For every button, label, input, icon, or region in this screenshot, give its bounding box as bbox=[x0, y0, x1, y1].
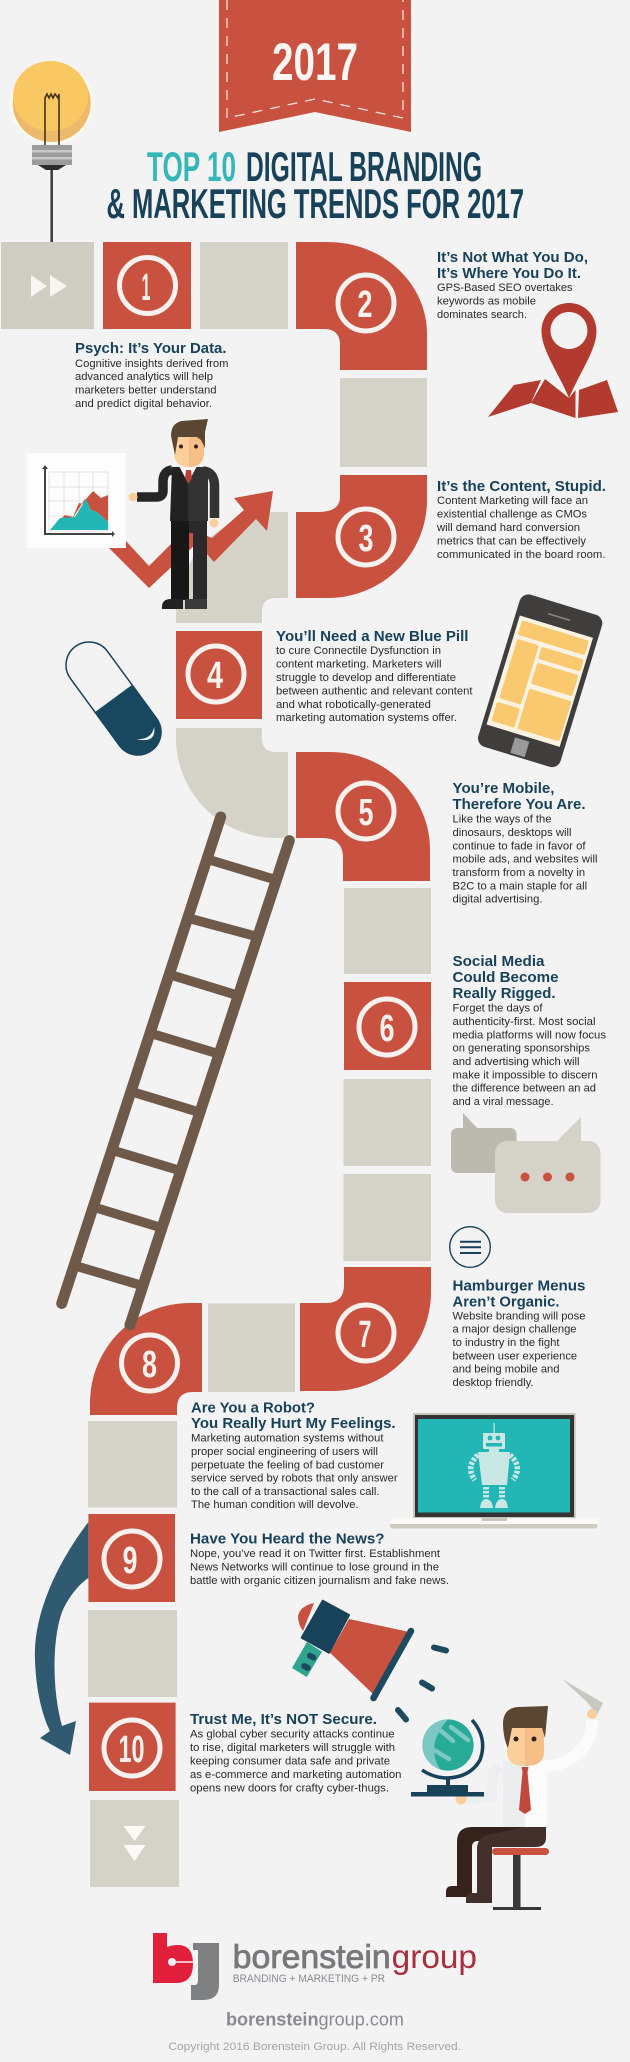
text: step 2: dominates search. bbox=[437, 309, 527, 321]
step 3: 3 bbox=[358, 518, 374, 560]
text: step 3: will demand hard conversion bbox=[436, 522, 580, 534]
text: step 8: to the call of a transactional sales call. bbox=[191, 1486, 380, 1498]
icon: smartphone bbox=[476, 592, 605, 769]
text: step 9: Nope, you’ve read it on Twitter first. Establishment bbox=[190, 1548, 441, 1560]
step 4: 4 bbox=[207, 655, 223, 697]
logo mark bbox=[153, 1933, 219, 2000]
blank tiles bbox=[344, 1079, 431, 1261]
step 1: 1 bbox=[142, 267, 150, 309]
text: step 5: You’re Mobile, bbox=[452, 780, 554, 797]
ladder bbox=[62, 817, 289, 1325]
text: step 6: make it impossible to discern bbox=[452, 1069, 598, 1081]
text: step 3: communicated in the board room. bbox=[437, 549, 606, 561]
text: step 6: Could Become bbox=[452, 969, 558, 986]
text: step 2: keywords as mobile bbox=[437, 296, 536, 308]
step 10: 10 bbox=[118, 1729, 144, 1771]
text: step 8: Marketing automation systems without bbox=[191, 1432, 384, 1444]
text: step 10 bbox=[190, 1711, 401, 1794]
text: step 5: digital advertising. bbox=[452, 894, 542, 906]
text: step 4: marketing automation systems offer. bbox=[276, 712, 457, 724]
logo wordmark: BRANDING + MARKETING + PR bbox=[233, 1973, 385, 1985]
title: TOP 10 bbox=[147, 143, 236, 190]
step 8: 8 bbox=[142, 1344, 157, 1386]
text: step 8: service served by robots that only answer bbox=[191, 1472, 398, 1484]
copyright: Copyright 2016 Borenstein Group. All Rights Reserved. bbox=[168, 2041, 461, 2053]
text: step 5: transform from a novelty in bbox=[452, 867, 585, 879]
icon: chat bubbles bbox=[451, 1113, 600, 1213]
text: step 4: to cure Connectile Dysfunction in bbox=[276, 645, 441, 657]
text: step 7: a major design challenge bbox=[452, 1324, 576, 1336]
step 10 bbox=[89, 1703, 176, 1791]
text: step 4: content marketing. Marketers will bbox=[276, 659, 442, 671]
text: step 6: and advertising which will bbox=[452, 1056, 580, 1068]
text: step 5: Like the ways of the bbox=[452, 814, 552, 826]
step 5 bbox=[296, 752, 430, 881]
text: step 10: keeping consumer data safe and private bbox=[190, 1755, 390, 1767]
text: step 4: struggle to develop and differentiate bbox=[276, 672, 456, 684]
step 5: 5 bbox=[358, 792, 374, 834]
text: step 6: media platforms will now focus bbox=[452, 1029, 606, 1041]
text: step 8: Are You a Robot? bbox=[191, 1400, 315, 1417]
text: step 1: and predict digital behavior. bbox=[75, 398, 212, 410]
text: step 1 bbox=[75, 340, 228, 410]
icon: laptop with robot bbox=[390, 1413, 598, 1528]
text: step 6: Really Rigged. bbox=[452, 985, 556, 1002]
blank tile bbox=[208, 1304, 295, 1392]
step 9: 9 bbox=[122, 1540, 138, 1582]
curved arrow from 9 to 10 bbox=[35, 1522, 88, 1755]
text: step 4: between authentic and relevant content bbox=[276, 686, 473, 698]
text: step 7: desktop friendly. bbox=[452, 1377, 534, 1389]
text: step 3: It’s the Content, Stupid. bbox=[437, 478, 606, 495]
text: step 6: Forget the days of bbox=[452, 1003, 543, 1015]
step 3 bbox=[296, 475, 427, 598]
end square bbox=[90, 1800, 179, 1887]
text: step 7: Aren’t Organic. bbox=[452, 1294, 560, 1311]
curved tile below man bbox=[176, 512, 288, 623]
text: step 2: It’s Not What You Do, bbox=[437, 249, 588, 266]
step 2: 2 bbox=[358, 284, 372, 326]
step 6 bbox=[344, 982, 431, 1070]
step 8 bbox=[90, 1303, 202, 1415]
step 7: 7 bbox=[358, 1314, 372, 1356]
illustration: chart panel bbox=[27, 453, 126, 548]
text: step 8: perpetuate the feeling of bad customer bbox=[191, 1459, 384, 1471]
text: step 2 bbox=[437, 249, 588, 321]
text: step 6: authenticity-first. Most social bbox=[452, 1016, 596, 1028]
text: step 1: Cognitive insights derived from bbox=[75, 358, 228, 370]
text: step 10: to rise, digital marketers will struggle with bbox=[190, 1742, 395, 1754]
text: step 5: mobile ads, and websites will bbox=[452, 854, 598, 866]
text: step 7: Website branding will pose bbox=[452, 1310, 586, 1322]
text: step 5: Therefore You Are. bbox=[452, 796, 586, 813]
illustration: rising arrow bbox=[109, 491, 273, 588]
text: step 4 bbox=[276, 628, 473, 724]
illustration: seated man bbox=[446, 1679, 603, 1910]
text: step 7: to industry in the fight bbox=[452, 1337, 560, 1349]
text: step 8 bbox=[191, 1400, 398, 1511]
text: step 7: and being mobile and bbox=[452, 1364, 560, 1376]
text: step 10: As global cyber security attacks continue bbox=[190, 1729, 395, 1741]
text: step 6 bbox=[452, 953, 606, 1108]
logo wordmark: borenstein bbox=[233, 1938, 391, 1975]
text: step 8: proper social engineering of users will bbox=[191, 1446, 378, 1458]
step 1 bbox=[103, 242, 191, 329]
text: step 8: The human condition will devolve. bbox=[191, 1499, 359, 1511]
text: step 6: on generating sponsorships bbox=[452, 1043, 590, 1055]
text: step 6: the difference between an ad bbox=[452, 1083, 596, 1095]
text: step 8: You Really Hurt My Feelings. bbox=[191, 1415, 396, 1432]
board path: start square bbox=[1, 242, 94, 329]
text: step 5: dinosaurs, desktops will bbox=[452, 827, 572, 839]
text: step 10: as e-commerce and marketing automation bbox=[190, 1769, 401, 1781]
text: step 10: Trust Me, It’s NOT Secure. bbox=[190, 1711, 377, 1728]
logo wordmark bbox=[233, 1938, 477, 1985]
blank tile bbox=[200, 242, 288, 329]
text: step 7: Hamburger Menus bbox=[452, 1278, 586, 1295]
text: step 1: Psych: It’s Your Data. bbox=[75, 340, 226, 357]
text: step 7: between user experience bbox=[452, 1350, 577, 1362]
logo wordmark: group bbox=[392, 1938, 477, 1975]
text: step 1: advanced analytics will help bbox=[75, 371, 213, 383]
text: step 5: continue to fade in favor of bbox=[452, 840, 586, 852]
text: step 4: You’ll Need a New Blue Pill bbox=[276, 628, 468, 645]
illustration: businessman bbox=[128, 419, 218, 609]
text: step 4: and what robotically-generated bbox=[276, 699, 431, 711]
step 4 bbox=[176, 631, 262, 719]
icon: megaphone bbox=[292, 1601, 446, 1720]
text: step 5 bbox=[452, 780, 598, 906]
curved tile below step 4 bbox=[176, 728, 288, 838]
text: step 2: GPS-Based SEO overtakes bbox=[437, 282, 573, 294]
banner: 2017 bbox=[219, 0, 411, 132]
icon: light bulb bbox=[10, 61, 94, 242]
website address: borensteingroup.com bbox=[226, 2010, 404, 2030]
step 7 bbox=[300, 1267, 431, 1391]
icon: map pin bbox=[488, 303, 618, 418]
text: step 9 bbox=[190, 1530, 449, 1587]
blank tile bbox=[344, 888, 431, 974]
text: step 3: Content Marketing will face an bbox=[437, 495, 588, 507]
banner: 2017: 2017 bbox=[272, 33, 358, 92]
text: step 2: It’s Where You Do It. bbox=[437, 265, 581, 282]
blank tile bbox=[88, 1421, 177, 1508]
text: step 7 bbox=[452, 1278, 586, 1389]
icon: globe bbox=[411, 1719, 484, 1796]
step 2 bbox=[296, 242, 427, 370]
text: step 9: News Networks will continue to lose ground in the bbox=[190, 1562, 439, 1574]
title bbox=[106, 143, 524, 227]
step 9 bbox=[88, 1514, 175, 1602]
blank tile bbox=[88, 1610, 177, 1697]
step 6: 6 bbox=[380, 1008, 394, 1050]
blank tile bbox=[340, 378, 427, 467]
text: step 6: Social Media bbox=[452, 953, 545, 970]
text: step 3: metrics that can be effectively bbox=[437, 536, 586, 548]
text: step 3 bbox=[436, 478, 606, 561]
text: step 9: Have You Heard the News? bbox=[190, 1530, 384, 1548]
text: step 3: existential challenge as CMOs bbox=[437, 509, 587, 521]
text: step 10: opens new doors for crafty cyber-thugs. bbox=[190, 1782, 389, 1794]
text: step 9: battle with organic citizen journalism and fake news. bbox=[190, 1575, 449, 1587]
icon: hamburger menu bbox=[450, 1227, 490, 1267]
icon: pill bbox=[57, 633, 170, 764]
text: step 1: marketers better understand bbox=[75, 384, 216, 396]
text: step 5: B2C to a main staple for all bbox=[452, 880, 587, 892]
text: step 6: and a viral message. bbox=[452, 1096, 554, 1108]
